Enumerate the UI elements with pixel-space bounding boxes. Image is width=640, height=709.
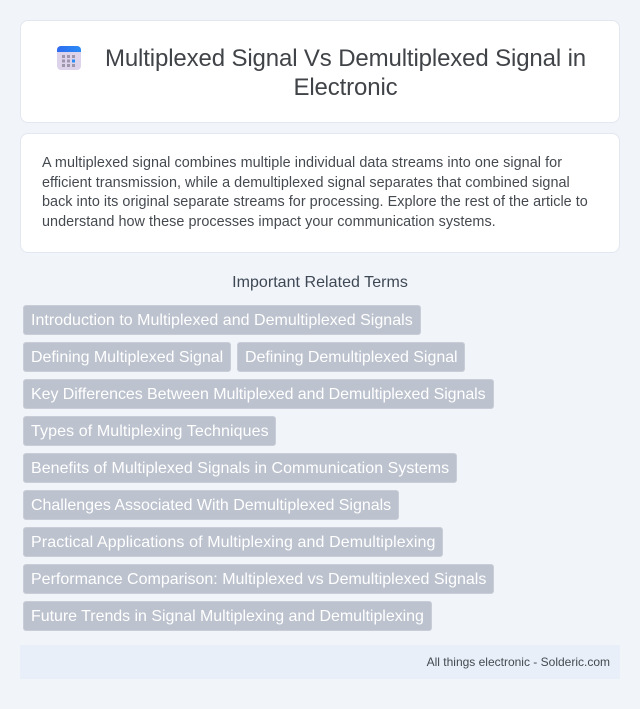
title text	[105, 45, 586, 101]
icon: calendar	[57, 46, 81, 70]
title text: Multiplexed Signal Vs Demultiplexed Signal in	[105, 45, 586, 72]
intro text: understand how these processes impact your communication systems.	[42, 214, 496, 230]
tag: Performance Comparison: Multiplexed vs Demultiplexed Signals	[31, 571, 486, 588]
tag: Challenges Associated With Demultiplexed Signals	[31, 497, 391, 514]
title text: Electronic	[293, 74, 398, 101]
intro text: back into its original separate streams for processing. Explore the rest of the article to	[42, 194, 588, 210]
title card	[20, 20, 620, 123]
tag: Key Differences Between Multiplexed and Demultiplexed Signals	[31, 386, 486, 403]
intro text	[42, 155, 588, 230]
tag: Introduction to Multiplexed and Demultiplexed Signals	[31, 312, 413, 329]
tag	[237, 342, 465, 372]
footer bar	[20, 645, 620, 679]
tag	[23, 490, 399, 520]
tag: Future Trends in Signal Multiplexing and Demultiplexing	[31, 608, 424, 625]
intro card	[20, 133, 620, 253]
tag	[23, 453, 457, 483]
footer text: All things electronic - Solderic.com	[427, 655, 610, 669]
tag: Benefits of Multiplexed Signals in Communication Systems	[31, 460, 449, 477]
tag: Defining Demultiplexed Signal	[245, 349, 458, 366]
tag	[23, 564, 494, 594]
tag	[23, 601, 432, 631]
tag	[23, 305, 421, 335]
tag: Practical Applications of Multiplexing and Demultiplexing	[31, 534, 436, 551]
tag	[23, 416, 276, 446]
term tags	[23, 305, 494, 631]
tag: Defining Multiplexed Signal	[31, 349, 223, 366]
tag: Types of Multiplexing Techniques	[31, 423, 269, 440]
intro text: A multiplexed signal combines multiple individual data streams into one signal for	[42, 155, 562, 171]
tag	[23, 342, 231, 372]
section heading: Important Related Terms	[232, 274, 408, 291]
intro text: efficient transmission, while a demultiplexed signal separates that combined signal	[42, 174, 570, 190]
tag	[23, 379, 494, 409]
tag	[23, 527, 443, 557]
